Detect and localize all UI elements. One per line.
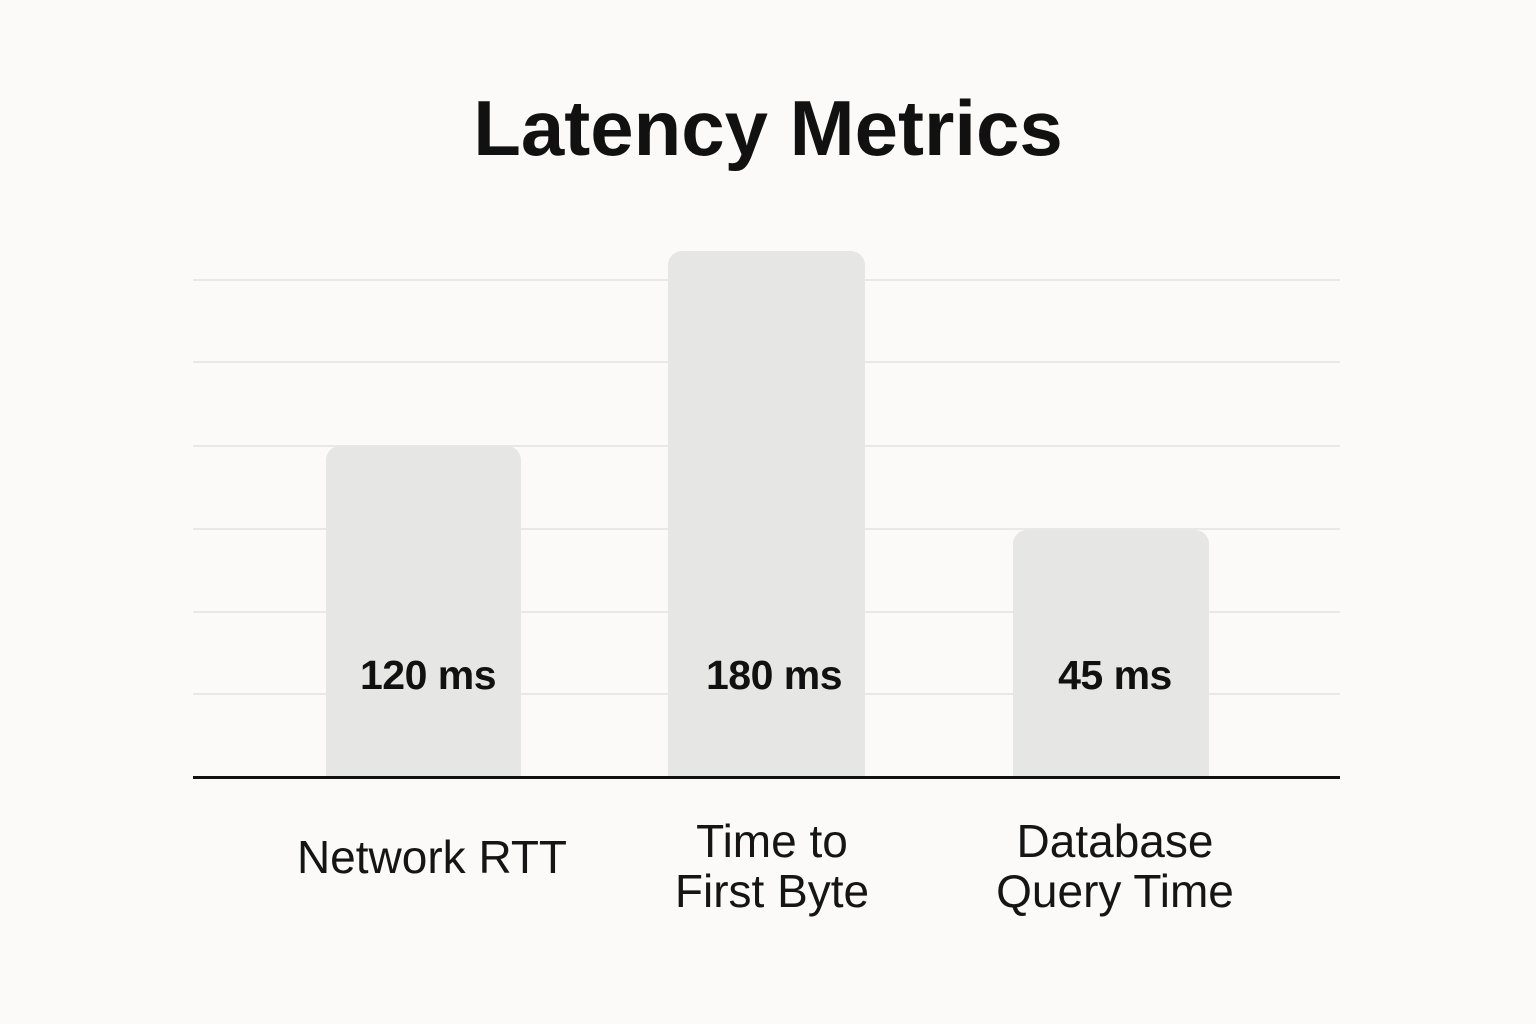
label: Time to First Byte <box>675 815 869 917</box>
bar: Database Query Time <box>1013 530 1209 777</box>
label: Network RTT: Network RTT <box>297 831 567 883</box>
label: Database Query Time: Query Time <box>996 865 1234 917</box>
value: 120 ms: 120 ms <box>360 652 496 698</box>
label: Database Query Time <box>996 815 1234 917</box>
value: 180 ms: 180 ms <box>706 652 842 698</box>
bar: Network RTT <box>326 446 521 777</box>
title: Latency Metrics <box>473 84 1063 172</box>
bar: Time to First Byte <box>668 251 865 777</box>
label: Database Query Time: Database <box>1017 815 1213 867</box>
x axis <box>193 776 1340 779</box>
value: 45 ms: 45 ms <box>1058 652 1172 698</box>
label: Time to First Byte: First Byte <box>675 865 869 917</box>
label: Time to First Byte: Time to <box>696 815 848 867</box>
